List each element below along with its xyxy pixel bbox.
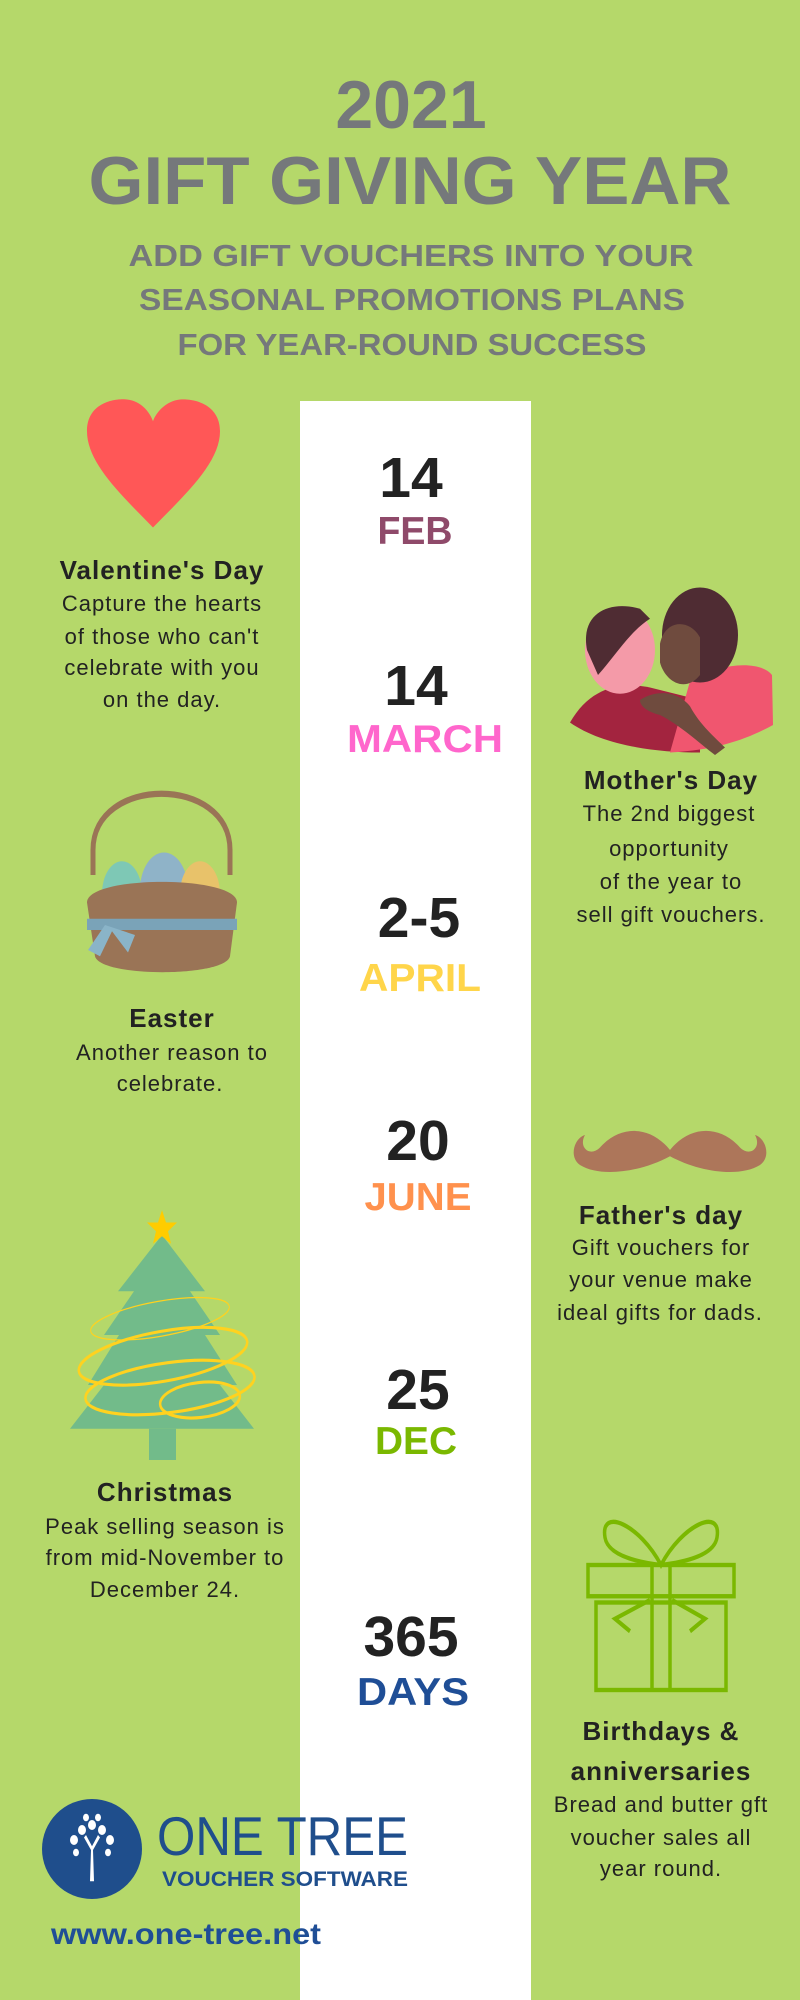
text: Father's day: your venue make — [569, 1267, 753, 1292]
text: Mother's Day: sell gift vouchers. — [577, 902, 765, 927]
title: GIFT GIVING YEAR — [88, 143, 732, 219]
icon: mother and child — [570, 588, 773, 755]
text: Mother's Day: The 2nd biggest — [583, 801, 755, 826]
text: Valentine's Day: Valentine's Day — [60, 555, 264, 585]
text: Birthdays & anniversaries: year round. — [600, 1856, 722, 1881]
text: Easter: celebrate. — [117, 1071, 223, 1096]
text: Mother's Day: opportunity — [609, 836, 729, 861]
text: Valentine's Day: on the day. — [103, 687, 221, 712]
date: 14 MARCH: 14 — [384, 654, 448, 718]
text: Valentine's Day: celebrate with you — [64, 655, 260, 680]
text: Mother's Day: of the year to — [600, 869, 742, 894]
timeline column — [300, 401, 531, 2000]
subtitle — [128, 238, 694, 362]
text: Christmas: from mid-November to — [46, 1545, 284, 1570]
text: Christmas: Peak selling season is — [45, 1514, 285, 1539]
text: Easter — [76, 1003, 268, 1096]
text: Christmas: Christmas — [97, 1477, 233, 1507]
text: Father's day: Gift vouchers for — [572, 1235, 750, 1260]
date: 14 FEB: FEB — [378, 510, 452, 553]
date: 20 JUNE: 20 — [386, 1109, 450, 1173]
subtitle: SEASONAL PROMOTIONS PLANS — [139, 282, 685, 317]
text: Valentine's Day: Capture the hearts — [62, 591, 262, 616]
text: Mother's Day: Mother's Day — [584, 765, 758, 795]
date: 14 FEB: 14 — [379, 446, 443, 510]
date: 2-5 APRIL: APRIL — [359, 957, 481, 1000]
text: Father's day: ideal gifts for dads. — [557, 1300, 763, 1325]
date: 20 JUNE — [364, 1109, 472, 1219]
text: Birthdays & anniversaries — [554, 1716, 768, 1881]
date: 14 FEB — [378, 446, 452, 553]
text: Valentine's Day — [60, 555, 264, 712]
text: Birthdays & anniversaries: voucher sales all — [571, 1825, 751, 1850]
date: 25 DEC — [375, 1358, 457, 1463]
date: 14 MARCH: MARCH — [347, 718, 503, 761]
icon: mustache — [574, 1131, 766, 1172]
text: Christmas: December 24. — [90, 1577, 240, 1602]
icon: christmas tree — [70, 1210, 257, 1460]
title — [88, 67, 732, 219]
text: Mother's Day — [577, 765, 765, 927]
text: Father's day: Father's day — [579, 1200, 743, 1230]
text: Birthdays & anniversaries: Bread and butter gft — [554, 1792, 768, 1817]
url: www.one-tree.net — [50, 1918, 321, 1951]
date: 14 MARCH — [347, 654, 503, 761]
text: Birthdays & anniversaries: anniversaries — [571, 1756, 751, 1786]
text: Birthdays & anniversaries: Birthdays & — [583, 1716, 739, 1746]
icon: easter basket — [87, 794, 237, 972]
date: 2-5 APRIL: 2-5 — [378, 886, 460, 950]
text: Easter: Another reason to — [76, 1040, 268, 1065]
logo: One Tree — [42, 1799, 408, 1899]
logo: One Tree: ONE TREE — [157, 1805, 408, 1867]
date: 20 JUNE: JUNE — [364, 1176, 472, 1219]
date: 2-5 APRIL — [359, 886, 481, 1000]
logo: One Tree: VOUCHER SOFTWARE — [162, 1868, 408, 1891]
date: 365 DAYS: DAYS — [357, 1671, 469, 1714]
subtitle: ADD GIFT VOUCHERS INTO YOUR — [128, 238, 694, 273]
text: Valentine's Day: of those who can't — [65, 624, 259, 649]
icon: gift box — [588, 1522, 734, 1690]
subtitle: FOR YEAR-ROUND SUCCESS — [178, 327, 646, 362]
date: 365 DAYS: 365 — [363, 1605, 459, 1669]
text: Father's day — [557, 1200, 763, 1325]
text: Christmas — [45, 1477, 285, 1602]
date: 25 DEC: 25 — [386, 1358, 450, 1422]
icon: heart — [87, 399, 220, 528]
title: 2021 — [335, 67, 487, 143]
date: 365 DAYS — [357, 1605, 469, 1714]
text: Easter: Easter — [129, 1003, 215, 1033]
date: 25 DEC: DEC — [375, 1420, 457, 1463]
